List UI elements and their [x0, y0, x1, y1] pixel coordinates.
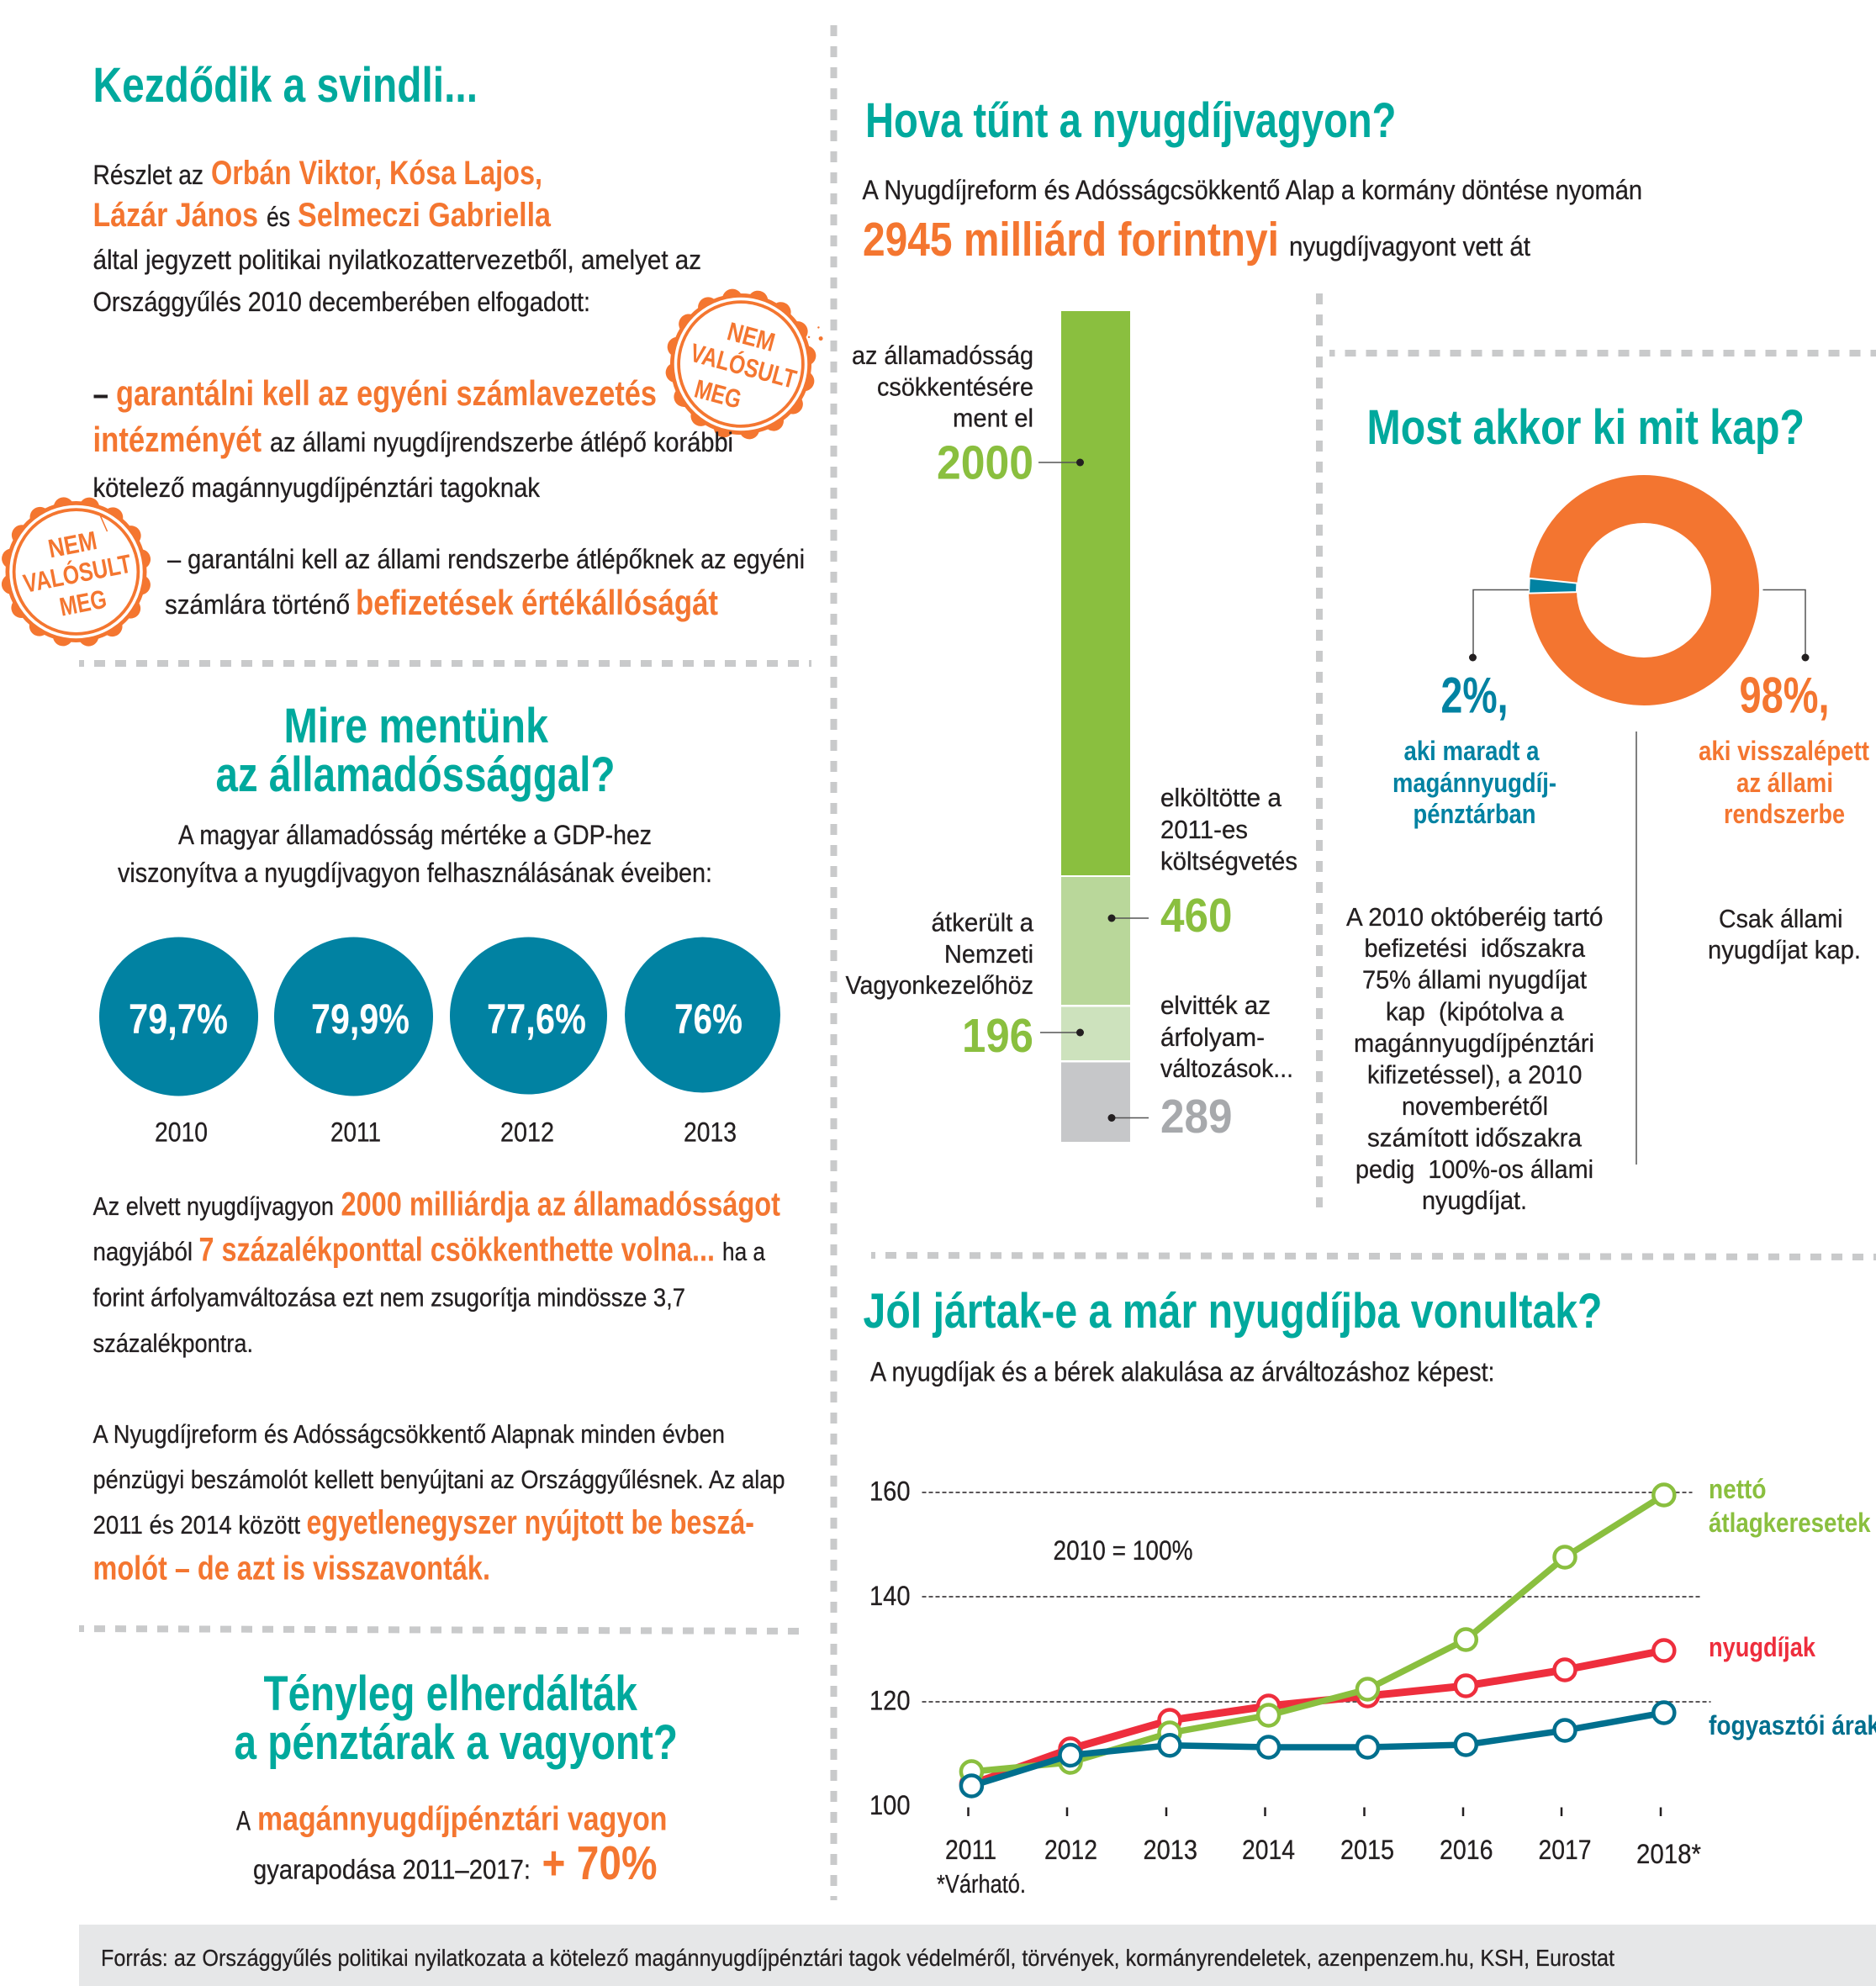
heading: Tényleg elherdálták	[264, 1666, 638, 1721]
x axis ticks and labels: 2018*	[1636, 1839, 1701, 1869]
label: államadósság 2000: 2000	[937, 436, 1033, 489]
text block: who stayed: novemberétől	[1402, 1091, 1548, 1121]
intro text block: Országgyűlés 2010 decemberében elfogadott:	[92, 287, 590, 317]
y axis labels: 140	[869, 1581, 910, 1611]
label: államadósság 2000: az államadósság	[852, 341, 1033, 370]
text block: debt reduction: 2000 milliárdja az államadósságot	[341, 1186, 780, 1223]
text block: who stayed: számított időszakra	[1367, 1123, 1583, 1152]
label: államadósság 2000	[852, 341, 1084, 489]
circle: 2011 debt	[274, 937, 433, 1147]
stamp: nem valósult meg (top): MEG	[691, 374, 744, 415]
circle: 2012 debt: 2012	[500, 1117, 554, 1147]
intro text block: által jegyzett politikai nyilatkozattervezetből, amelyet az	[92, 245, 701, 275]
text block: financial report: pénzügyi beszámolót kellett benyújtani az Országgyűlésnek. Az alap	[92, 1465, 785, 1494]
circle: 2010 debt: 2010	[155, 1117, 208, 1147]
callout: 2 percent: 2%,	[1441, 668, 1509, 723]
stacked bar chart	[1061, 311, 1130, 1142]
text block: who stayed: kap (kipótolva a	[1386, 997, 1564, 1026]
text block: who stayed: kifizetéssel), a 2010	[1367, 1059, 1583, 1090]
label: árfolyam 289	[1108, 990, 1293, 1144]
text block: debt reduction	[92, 1186, 780, 1358]
text block: who stayed: A 2010 októberéig tartó	[1346, 902, 1603, 932]
subtitle: A nyugdíjak és a bérek alakulása az árváltozáshoz képest:	[870, 1357, 1495, 1387]
text block: financial report: molót – de azt is visszavonták.	[92, 1550, 490, 1587]
callout: 98 percent: az állami	[1736, 768, 1833, 798]
y axis labels	[869, 1476, 910, 1820]
text block: first promise: garantálni kell az egyéni számlavezetés	[116, 373, 657, 413]
callout: 2 percent: magánnyugdíj-	[1392, 768, 1556, 798]
stamp: nem valósult meg (left): VALÓSULT	[21, 548, 134, 599]
text block: debt reduction: Az elvett nyugdíjvagyon	[92, 1191, 334, 1221]
label: vagyonkezelő 196	[846, 908, 1084, 1063]
text block: financial report	[92, 1419, 785, 1587]
callout: 2 percent: aki maradt a	[1404, 736, 1540, 766]
text block: second promise	[165, 544, 805, 622]
text block: first promise	[92, 373, 733, 503]
intro text block: Selmeczi Gabriella	[298, 197, 552, 234]
stamp: nem valósult meg (left): MEG	[57, 584, 109, 622]
label: államadósság 2000: csökkentésére	[877, 372, 1033, 402]
text block: second promise: befizetések értékállóságát	[356, 583, 718, 622]
circle: 2011 debt: 79,9%	[311, 996, 410, 1043]
intro text block: nyugdíjvagyont vett át	[1289, 231, 1530, 261]
x axis ticks and labels: 2017	[1539, 1835, 1591, 1865]
callout: 2 percent	[1392, 668, 1556, 829]
text block: who stayed: magánnyugdíjpénztári	[1354, 1028, 1594, 1058]
text block: who stayed: 75% állami nyugdíjat	[1362, 965, 1587, 994]
label: vagyonkezelő 196: Vagyonkezelőhöz	[846, 970, 1033, 1000]
label: költségvetés 460: költségvetés	[1160, 846, 1297, 876]
label: vagyonkezelő 196: 196	[962, 1009, 1033, 1063]
panel: most akkor ki mit kap	[1346, 400, 1869, 1215]
text block: who returned	[1708, 904, 1861, 964]
stamp: nem valósult meg (left)	[0, 489, 159, 654]
x axis ticks and labels: 2011	[945, 1835, 996, 1865]
y axis labels: 100	[869, 1790, 910, 1820]
legend: nyugdíjak: nyugdíjak	[1709, 1632, 1815, 1662]
text block: first promise: kötelező magánnyugdíjpénztári tagoknak	[92, 473, 541, 503]
text block: financial report: egyetlenegyszer nyújtott be beszá-	[306, 1504, 754, 1541]
intro text block: 2945 milliárd forintnyi	[863, 213, 1279, 267]
callout: 98 percent: rendszerbe	[1724, 799, 1845, 829]
footnote: *Várható.	[937, 1869, 1026, 1899]
legend: nettó átlagkeresetek: nettó	[1709, 1474, 1766, 1504]
callout: 98 percent: 98%,	[1739, 668, 1830, 723]
connector: 2 percent	[1469, 590, 1529, 661]
donut chart	[1529, 499, 1736, 681]
y axis labels: 160	[869, 1476, 910, 1507]
x axis ticks and labels: 2014	[1242, 1835, 1295, 1865]
x axis ticks and labels	[945, 1808, 1701, 1869]
source footer	[79, 1925, 1876, 1986]
label: árfolyam 289: 289	[1160, 1090, 1233, 1144]
heading: Kezdődik a svindli...	[92, 58, 478, 113]
heading: Jól jártak-e a már nyugdíjba vonultak?	[863, 1284, 1603, 1339]
text block: who returned: nyugdíjat kap.	[1708, 935, 1861, 964]
x axis ticks and labels: 2015	[1340, 1835, 1394, 1865]
series: nettó átlagkeresetek	[961, 1485, 1674, 1783]
intro text block: Orbán Viktor, Kósa Lajos,	[211, 155, 542, 192]
label: államadósság 2000: ment el	[953, 404, 1033, 432]
heading: Mire mentünk	[284, 699, 549, 753]
panel: jól jártak-e	[863, 1284, 1876, 1899]
text block: debt reduction: nagyjából	[92, 1237, 193, 1266]
heading	[215, 699, 616, 802]
circle: 2012 debt: 77,6%	[487, 996, 586, 1043]
label: vagyonkezelő 196: átkerült a	[932, 908, 1034, 937]
circle: 2013 debt: 2013	[684, 1117, 737, 1147]
circle: 2013 debt	[625, 937, 780, 1147]
label: árfolyam 289: változások...	[1160, 1054, 1293, 1083]
text block: second promise: – garantálni kell az állami rendszerbe átlépőknek az egyéni	[167, 544, 805, 574]
connector: 98 percent	[1762, 590, 1810, 661]
circle: 2010 debt: 79,7%	[129, 996, 228, 1043]
intro text block: és	[267, 202, 290, 232]
text block: financial report: 2011 és 2014 között	[92, 1510, 300, 1540]
panel: mire mentünk az államadóssággal	[92, 699, 785, 1587]
stamp: nem valósult meg (top): VALÓSULT	[687, 337, 800, 394]
callout: plus 70 percent	[236, 1801, 668, 1890]
stamp: nem valósult meg (top): NEM	[724, 316, 778, 357]
stamp: nem valósult meg (top)	[654, 277, 829, 452]
heading	[234, 1666, 678, 1770]
label: vagyonkezelő 196: Nemzeti	[944, 939, 1033, 969]
label: költségvetés 460	[1108, 783, 1297, 943]
text block: who stayed: pedig 100%-os állami	[1355, 1154, 1593, 1184]
callout: plus 70 percent: + 70%	[542, 1836, 658, 1890]
series: fogyasztói árak	[961, 1702, 1674, 1796]
circle: 2012 debt	[450, 937, 607, 1147]
heading: az államadóssággal?	[215, 747, 616, 802]
x axis ticks and labels: 2016	[1440, 1835, 1493, 1865]
text block: financial report: A Nyugdíjreform és Adósságcsökkentő Alapnak minden évben	[92, 1419, 725, 1449]
callout: plus 70 percent: magánnyugdíjpénztári vagyon	[257, 1801, 668, 1838]
circle: 2010 debt	[99, 937, 258, 1147]
text block: first promise: intézményét	[92, 420, 262, 459]
text block: first promise: az állami nyugdíjrendszerbe átlépő korábbi	[270, 427, 733, 457]
heading: a pénztárak a vagyont?	[234, 1715, 678, 1770]
series: nyugdíjak	[961, 1640, 1674, 1794]
line chart	[869, 1474, 1876, 1899]
circle: 2013 debt: 76%	[674, 996, 742, 1043]
panel: hova tűnt a nyugdíjvagyon	[846, 93, 1642, 1144]
text block: who returned: Csak állami	[1719, 904, 1843, 933]
label: költségvetés 460: 2011-es	[1160, 815, 1248, 844]
intro text block	[863, 175, 1642, 267]
subtitle: viszonyítva a nyugdíjvagyon felhasználásának éveiben:	[118, 858, 712, 888]
heading: Hova tűnt a nyugdíjvagyon?	[865, 93, 1396, 148]
text block: who stayed	[1346, 902, 1603, 1215]
intro text block: Részlet az	[92, 160, 203, 190]
callout: 98 percent	[1699, 668, 1869, 829]
circle: 2011 debt: 2011	[330, 1117, 381, 1147]
panel: tényleg elherdálták	[234, 1666, 678, 1890]
text block: debt reduction: 7 százalékponttal csökkenthette volna...	[198, 1231, 715, 1268]
intro text block	[92, 155, 701, 317]
intro text block: A Nyugdíjreform és Adósságcsökkentő Alap a kormány döntése nyomán	[863, 175, 1642, 205]
label: árfolyam 289: elvitték az	[1160, 990, 1271, 1020]
callout: 2 percent: pénztárban	[1413, 799, 1535, 829]
y axis labels: 120	[869, 1685, 910, 1715]
text block: debt reduction: forint árfolyamváltozása ezt nem zsugorítja mindössze 3,7	[92, 1283, 685, 1312]
x axis ticks and labels: 2012	[1044, 1835, 1097, 1865]
text block: debt reduction: ha a	[722, 1237, 766, 1266]
text block: who stayed: befizetési időszakra	[1364, 933, 1586, 963]
callout: plus 70 percent: A	[236, 1806, 251, 1836]
legend: nettó átlagkeresetek	[1709, 1474, 1871, 1538]
x axis ticks and labels: 2013	[1144, 1835, 1197, 1865]
intro text block: Lázár János	[92, 197, 258, 234]
text block: first promise: –	[92, 376, 108, 413]
stamp: nem valósult meg (left): NEM	[45, 526, 99, 563]
source footer: Forrás: az Országgyűlés politikai nyilatkozata a kötelező magánnyugdíjpénztári tagok védelméről, törvények, kormányrendeletek, azenpenzem.hu, KSH, Eurostat	[101, 1945, 1614, 1971]
label: költségvetés 460: 460	[1160, 889, 1233, 943]
panel: kezdődik a svindli	[92, 58, 805, 622]
label: árfolyam 289: árfolyam-	[1160, 1022, 1265, 1052]
subtitle	[118, 820, 712, 888]
note: base year: 2010 = 100%	[1053, 1535, 1192, 1566]
subtitle: A magyar államadósság mértéke a GDP-hez	[178, 820, 652, 850]
text block: second promise: számlára történő	[165, 589, 350, 620]
text block: debt reduction: százalékpontra.	[92, 1328, 253, 1358]
label: költségvetés 460: elköltötte a	[1160, 783, 1282, 812]
callout: plus 70 percent: gyarapodása 2011–2017:	[253, 1855, 531, 1885]
text block: who stayed: nyugdíjat.	[1422, 1186, 1527, 1215]
